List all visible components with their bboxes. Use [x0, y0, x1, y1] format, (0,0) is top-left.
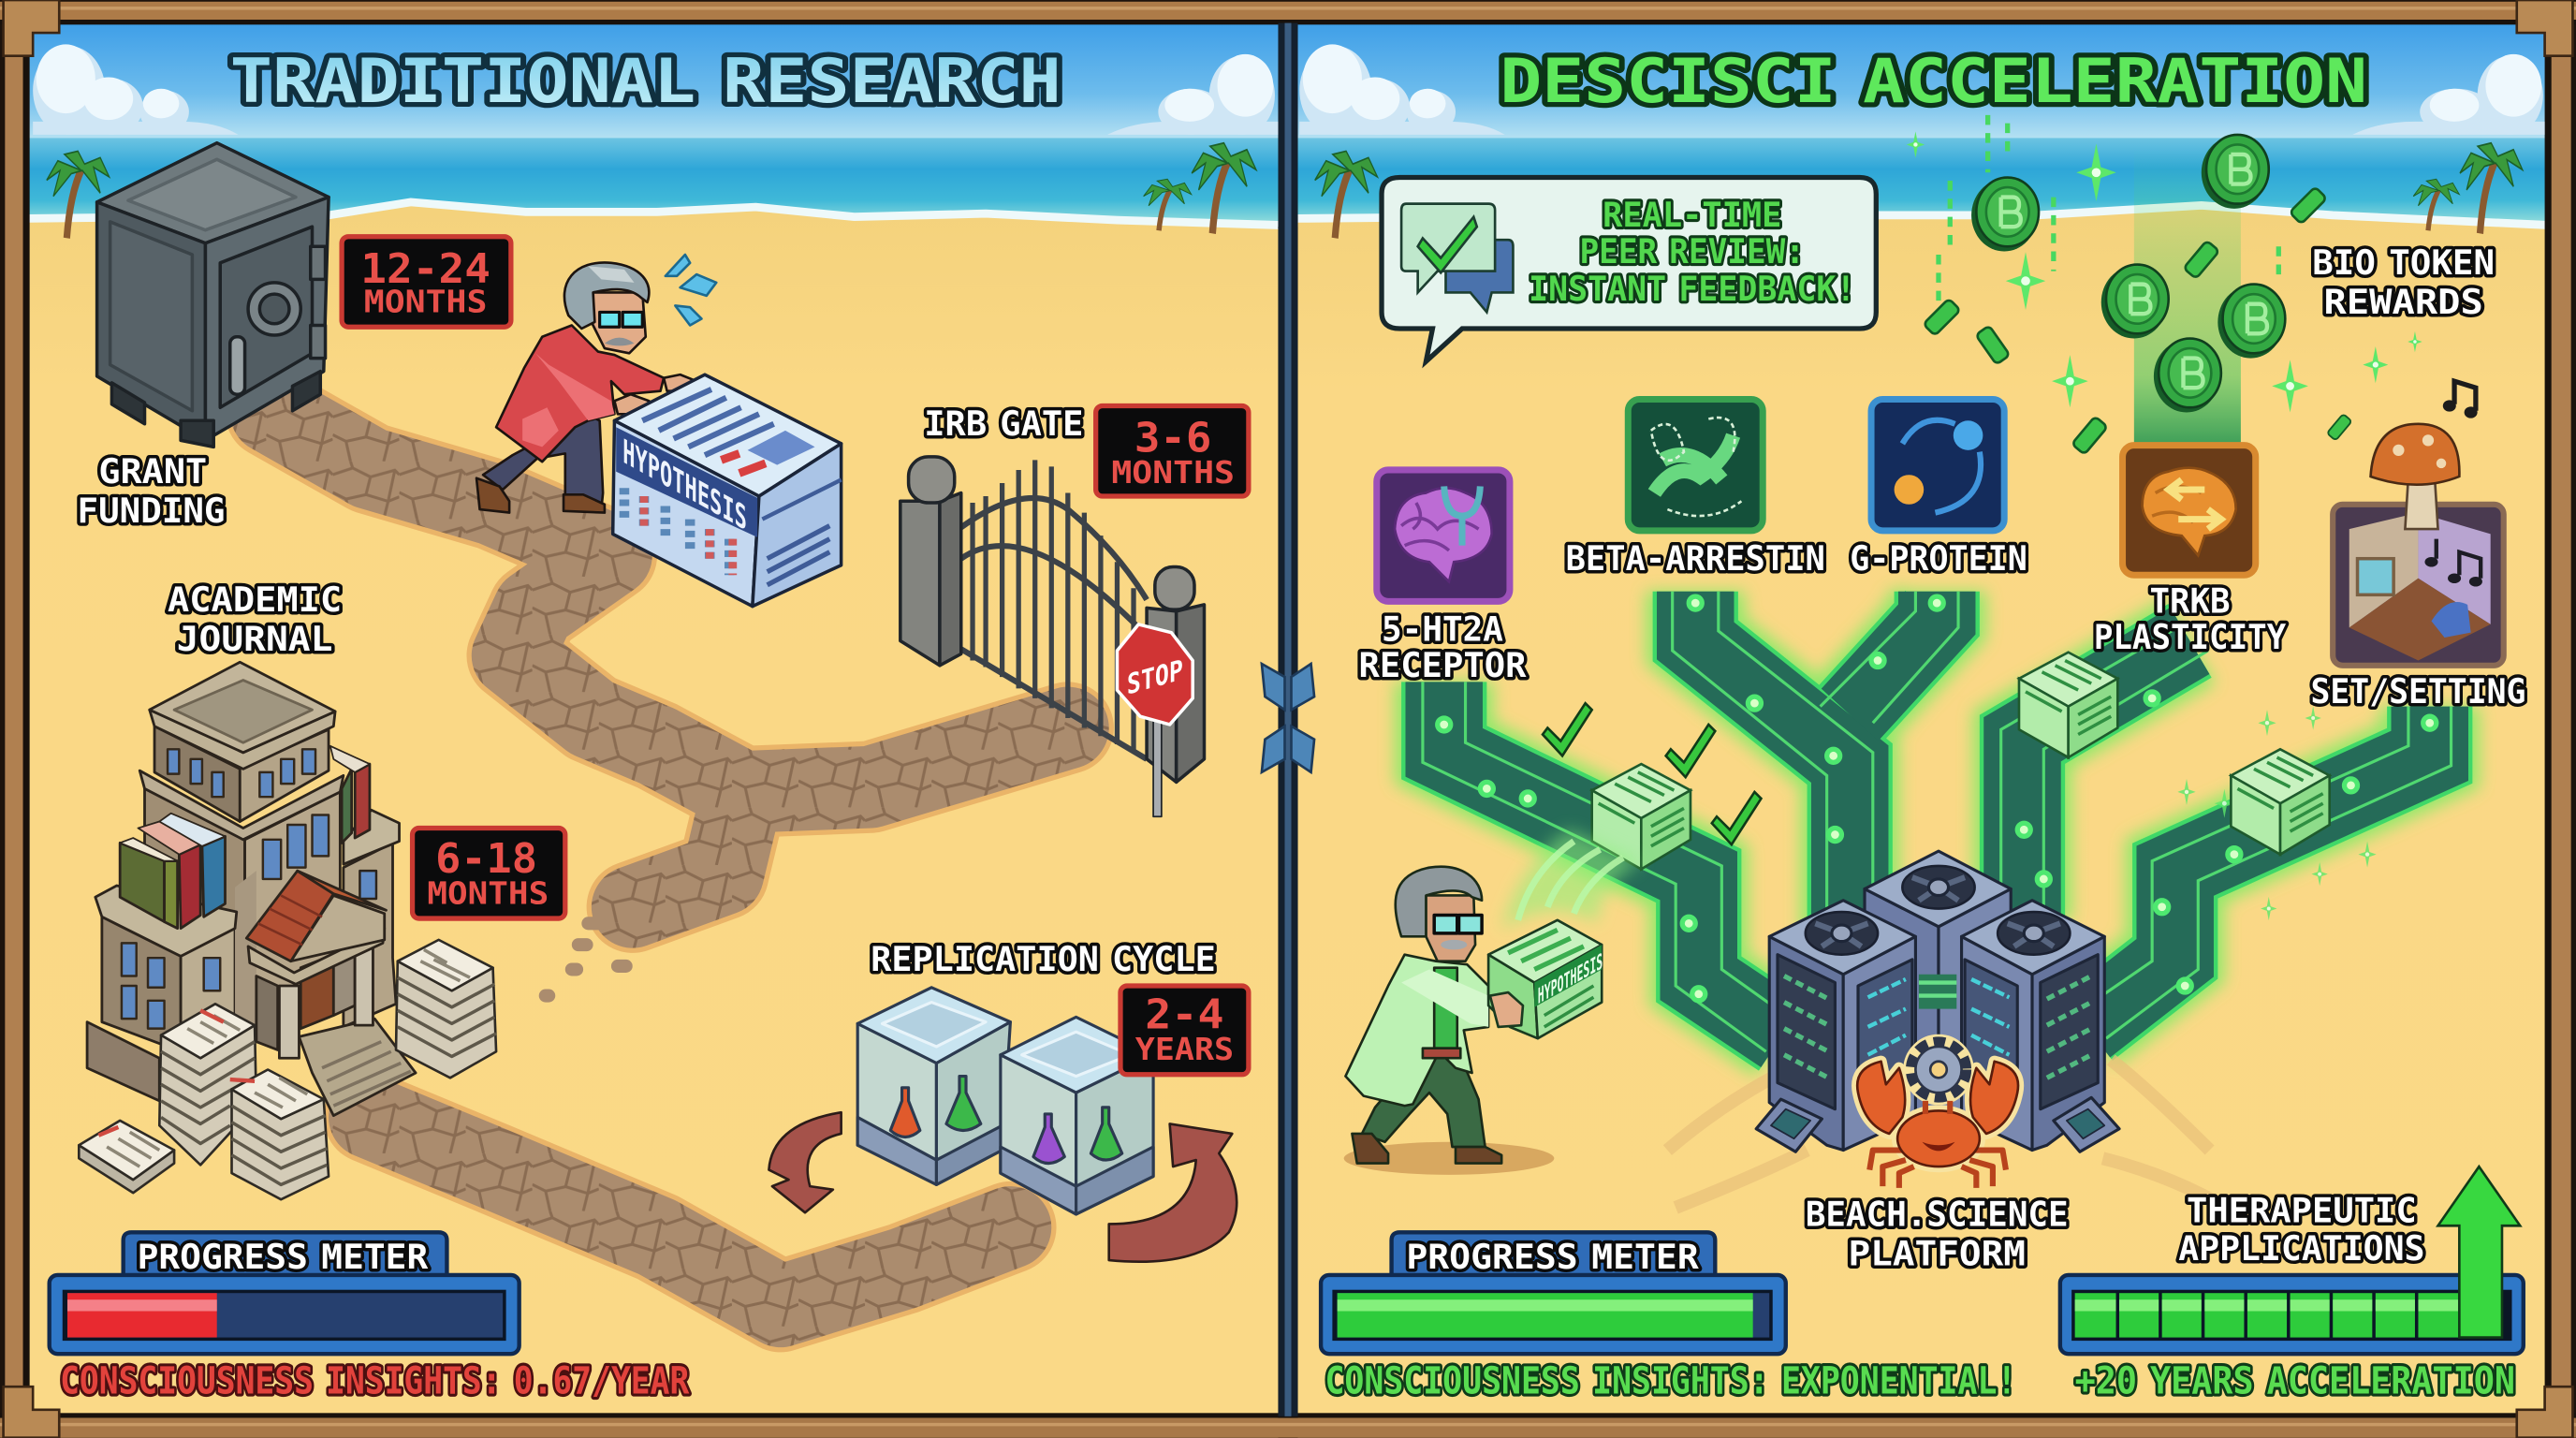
label: grant funding: FUNDING: [78, 491, 225, 531]
label and timer: IRB gate: 3-6: [1134, 415, 1211, 462]
arrow: therapeutic up: [2438, 1167, 2520, 1338]
speech bubble: real-time peer review: INSTANT FEEDBACK!: [1529, 269, 1855, 309]
label: grant funding: GRANT: [98, 451, 207, 492]
node: set and setting room with mushroom: [2311, 424, 2525, 712]
panel: descisci acceleration: [1299, 44, 2545, 1402]
timer: 2-4 years: [1120, 986, 1249, 1075]
node: beta-arrestin: [1566, 399, 1825, 579]
label: beach.science platform: [1806, 1194, 2069, 1273]
circuit pathways: [1423, 592, 2452, 1051]
label: academic journal: [168, 580, 342, 659]
arrow: cycle right: [1109, 1123, 1237, 1262]
label: bio token rewards: [2312, 242, 2495, 322]
clouds and palms, right panel: [1299, 44, 2545, 238]
label: therapeutic applications: [2178, 1191, 2424, 1269]
label: beach.science platform: PLATFORM: [1848, 1233, 2026, 1273]
portico: [246, 871, 416, 1116]
hypothesis data block: HYPOTHESIS: [622, 433, 747, 539]
academic journal building: [87, 662, 416, 1116]
label: therapeutic applications: THERAPEUTIC: [2187, 1191, 2417, 1231]
label: replication cycle: REPLICATION CYCLE: [871, 939, 1216, 979]
label and timer: IRB gate: MONTHS: [1111, 454, 1235, 491]
bio token coins and sparkles: [1907, 115, 2422, 455]
speech bubble: real-time peer review: REAL-TIME: [1603, 195, 1781, 235]
hypothesis block carried: HYPOTHESIS: [1538, 949, 1603, 1009]
node: set and setting room with mushroom: SET/SETTING: [2311, 671, 2525, 712]
central divider: [1262, 23, 1314, 1416]
node: 5-HT2A receptor: [1358, 470, 1527, 685]
hypothesis blocks on pathways: [1592, 653, 2330, 869]
timer: 12-24 months: 12-24: [360, 245, 490, 293]
speech bubble: real-time peer review: [1382, 178, 1876, 361]
timer: 12-24 months: MONTHS: [364, 283, 487, 319]
icon: chat check: [1401, 204, 1513, 312]
node: TrkB plasticity: PLASTICITY: [2094, 617, 2287, 657]
lower left block with books: [87, 814, 256, 1101]
icon: music note: [2443, 381, 2478, 418]
label and timer: IRB gate: IRB GATE: [924, 404, 1083, 444]
token beam: [2134, 148, 2241, 452]
right lower block: [330, 746, 400, 1027]
paper stacks: [79, 940, 496, 1199]
clouds and palms, left panel: [33, 44, 1278, 238]
arrow: cycle left: [768, 1112, 842, 1212]
label: grant funding: [78, 451, 225, 531]
sand scuffs around servers: [1667, 1060, 2226, 1208]
consciousness insights: 0.67/year: CONSCIOUSNESS INSIGHTS: 0.67/YEAR: [60, 1358, 690, 1402]
hypothesis block carried: [1488, 920, 1603, 1038]
timer: 6-18 months: [413, 829, 565, 918]
glass replication chambers: [857, 988, 1153, 1214]
IRB gate with stop sign: STOP: [1127, 653, 1183, 701]
icon: grant funding safe: [97, 143, 329, 447]
label: beach.science platform: BEACH.SCIENCE: [1806, 1194, 2069, 1234]
node: beta-arrestin: BETA-ARRESTIN: [1566, 538, 1825, 579]
timer: 6-18 months: 6-18: [435, 835, 537, 883]
plus 20 years acceleration: +20 YEARS ACCELERATION: [2075, 1358, 2515, 1402]
icon: brain: [1395, 486, 1492, 581]
title: descisci acceleration: DESCISCI ACCELERATION: [1500, 47, 2367, 117]
beach.science server cluster: [1756, 851, 2119, 1152]
green scientist carrying hypothesis: [1344, 867, 1554, 1175]
node: g-protein: G-PROTEIN: [1850, 538, 2027, 579]
timer: 12-24 months: [342, 237, 511, 327]
IRB gate with stop sign: [900, 457, 1204, 816]
green energy swoosh: [1501, 829, 1643, 930]
progress meter: traditional: PROGRESS METER: [138, 1237, 429, 1277]
node: g-protein: [1850, 399, 2027, 579]
sparkles near pathways: [2177, 706, 2377, 920]
progress meter: traditional: [50, 1232, 520, 1354]
timer: 6-18 months: MONTHS: [427, 874, 549, 911]
node: 5-HT2A receptor: RECEPTOR: [1358, 645, 1527, 685]
label: academic journal: JOURNAL: [177, 619, 332, 659]
cobblestone road: [271, 413, 1068, 1306]
progress meter: descisci: [1321, 1232, 1786, 1354]
node: 5-HT2A receptor: 5-HT2A: [1382, 609, 1503, 649]
title: traditional research: TRADITIONAL RESEARCH: [230, 47, 1061, 117]
mid tower: [139, 662, 344, 1040]
red scientist pushing box: [476, 255, 716, 513]
hypothesis data block: [613, 374, 842, 607]
panel: traditional research: [33, 44, 1278, 1402]
therapeutic progress bar with arrow: [2060, 1167, 2524, 1354]
label: academic journal: ACADEMIC: [168, 580, 342, 620]
node: TrkB plasticity: [2094, 446, 2287, 657]
label: bio token rewards: BIO TOKEN: [2312, 242, 2495, 283]
label: bio token rewards: REWARDS: [2324, 282, 2483, 322]
label and timer: IRB gate: [924, 404, 1249, 496]
label: therapeutic applications: APPLICATIONS: [2178, 1228, 2424, 1269]
timer: 2-4 years: YEARS: [1135, 1031, 1234, 1067]
consciousness insights: exponential: CONSCIOUSNESS INSIGHTS: EXPONENTIAL!: [1325, 1358, 2016, 1402]
approval checks: [1543, 703, 1761, 844]
timer: 2-4 years: 2-4: [1145, 991, 1224, 1039]
speech bubble: real-time peer review: PEER REVIEW:: [1580, 231, 1805, 271]
progress meter: descisci: PROGRESS METER: [1406, 1237, 1700, 1277]
node: TrkB plasticity: TRKB: [2150, 581, 2231, 622]
crab mascot with gear: [1857, 1040, 2018, 1188]
